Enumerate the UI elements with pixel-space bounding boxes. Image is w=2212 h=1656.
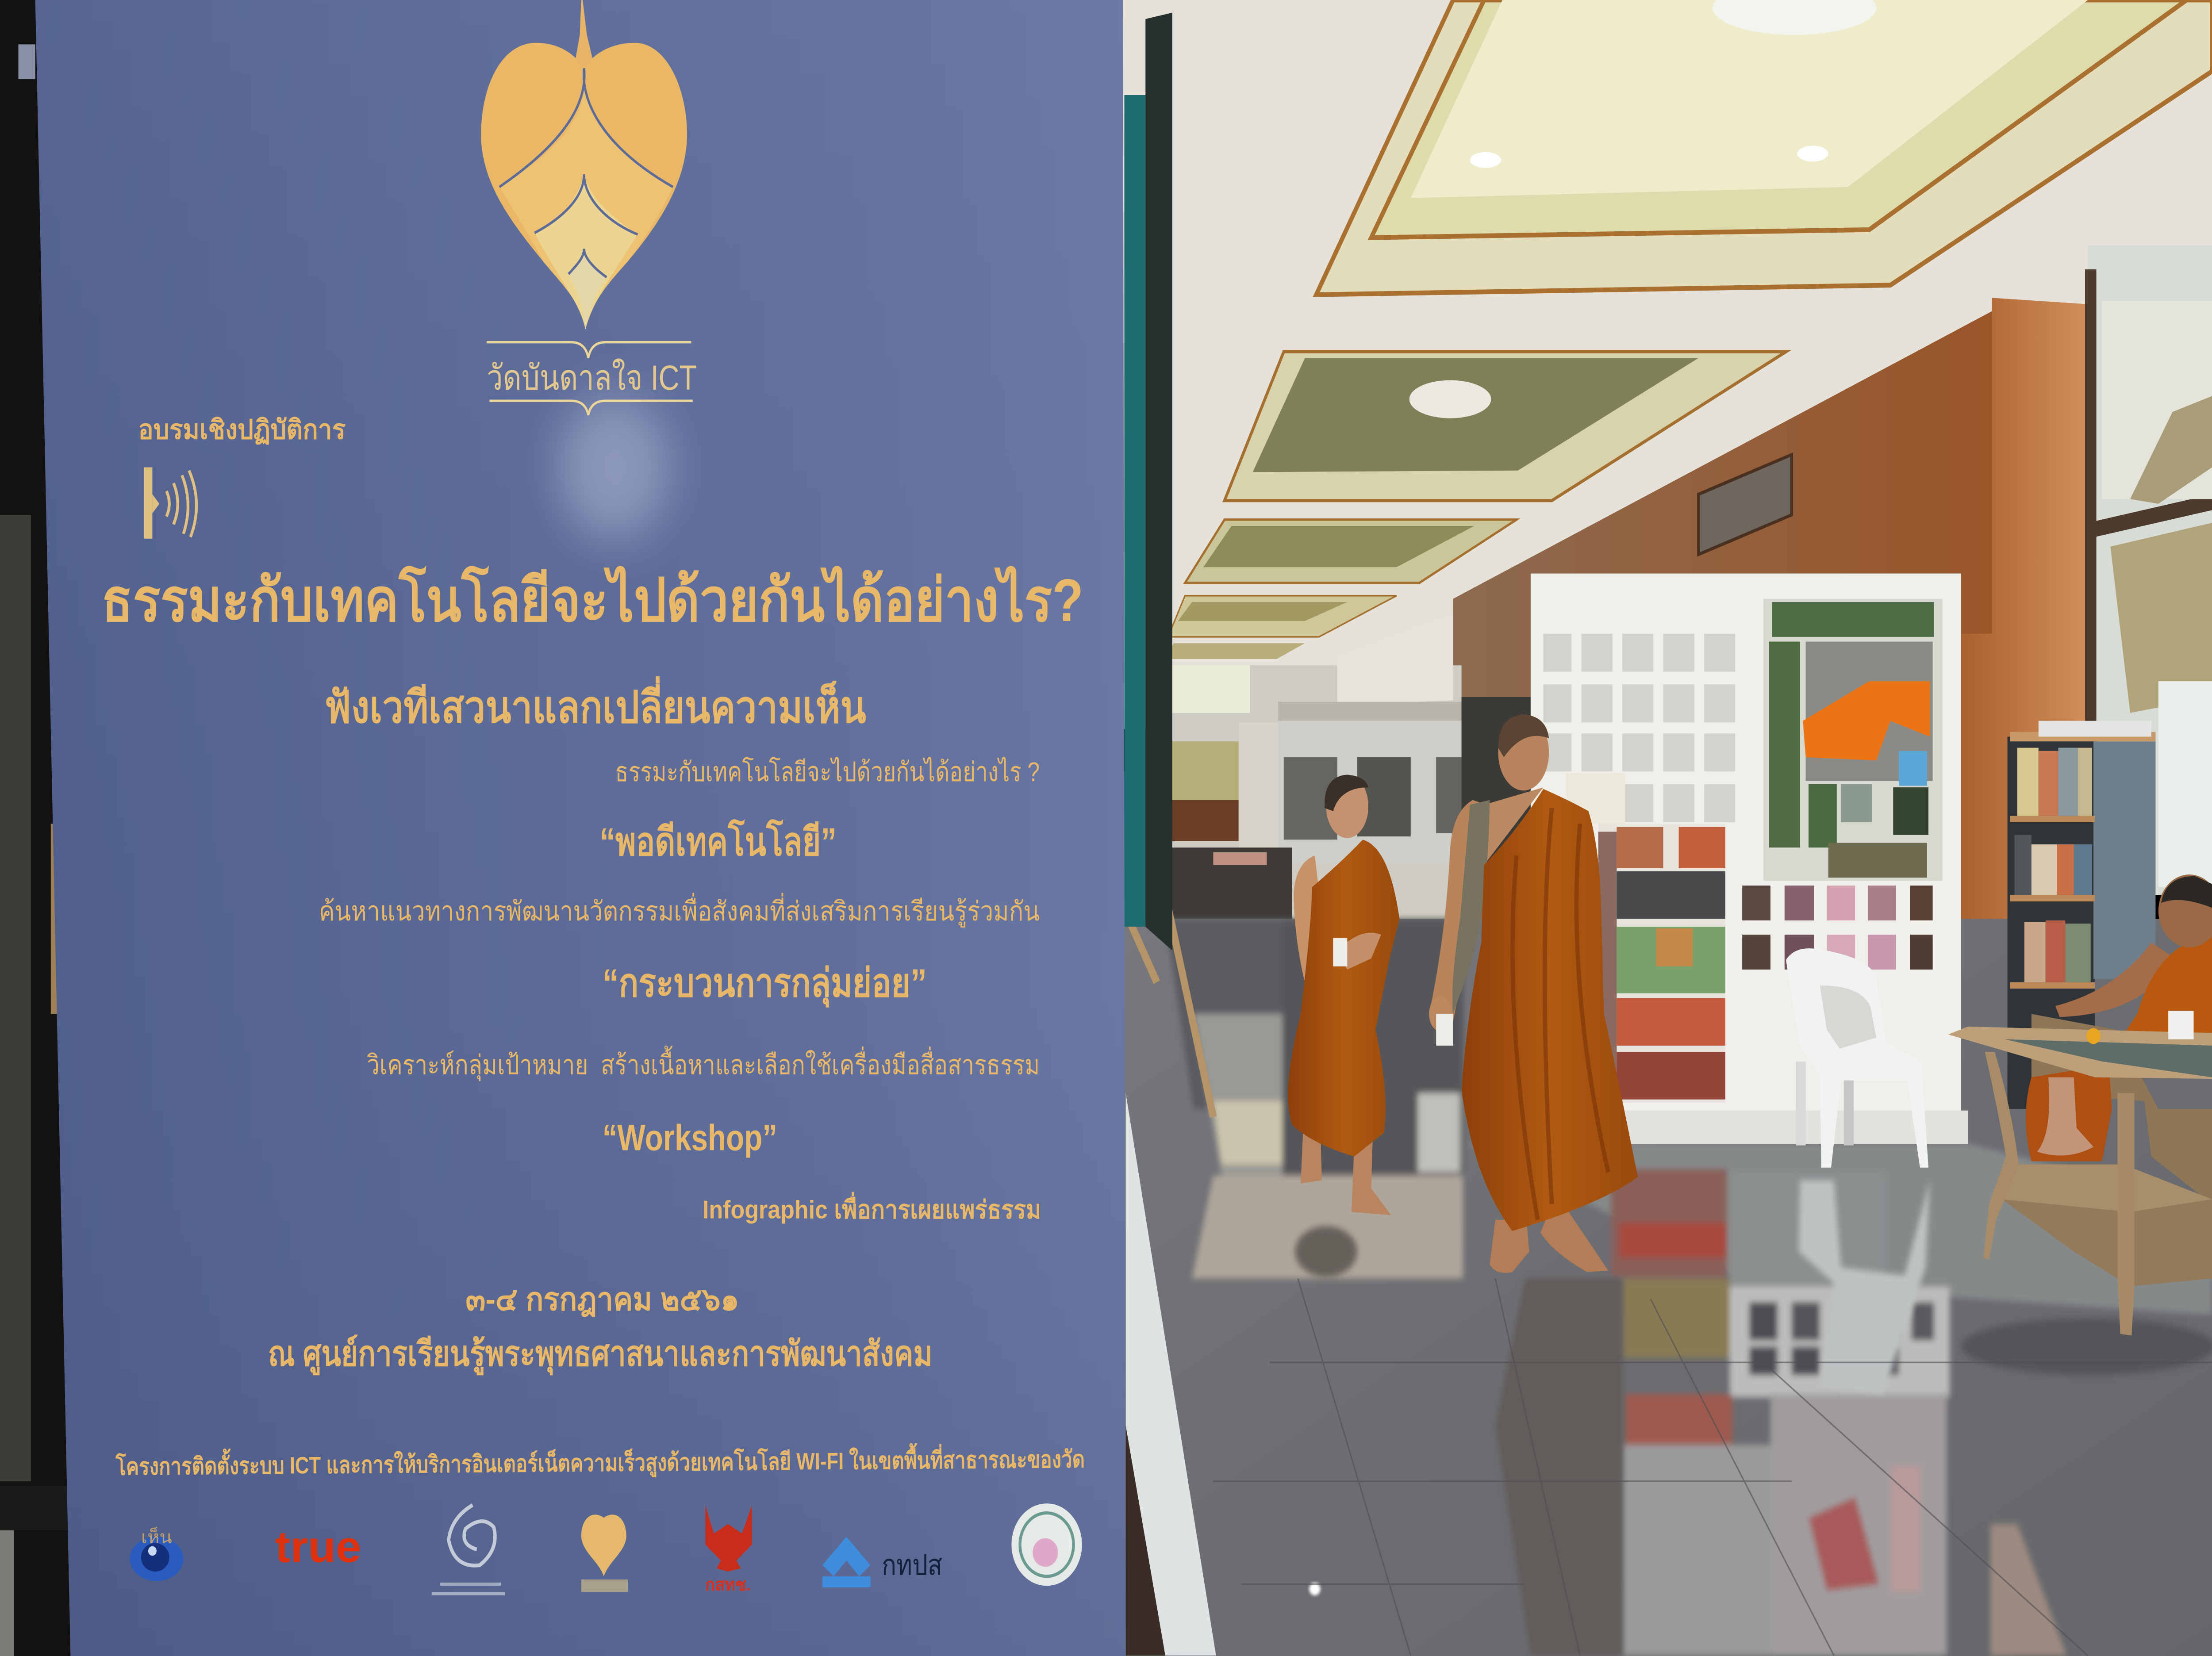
wooden wall (1453, 298, 2088, 1157)
bag strap (1452, 800, 1490, 1014)
legs (1301, 1122, 1391, 1215)
logo: blue eye: เห็น (141, 1526, 172, 1547)
seated monk and rattan table (1948, 874, 2212, 1335)
logo: small leaf (581, 1514, 628, 1592)
ceiling coffer 4 (1165, 596, 1397, 659)
logo: true: true (275, 1522, 361, 1572)
logo: blue chevron: กทปส (882, 1549, 942, 1581)
workshop description: Infographic เพื่อการเผยแพร่ธรรม (703, 1192, 1041, 1224)
appropriate technology description: ค้นหาแนวทางการพัฒนานวัตกรรมเพื่อสังคมที่ส่งเสริมการเรียนรู้ร่วมกัน (319, 893, 1040, 928)
logo: swirl (432, 1505, 505, 1594)
main monk (1429, 714, 1638, 1273)
ceiling coffer 2 (1225, 352, 1786, 501)
logo: garuda: กสทช. (705, 1575, 750, 1595)
table top (1948, 1027, 2212, 1079)
far corridor background (1165, 615, 1532, 939)
hand (1310, 968, 1330, 1003)
seated monk robe (2116, 935, 2212, 1046)
arm (1294, 855, 1329, 1001)
rattan armchair (2032, 1014, 2212, 1204)
ceiling coffer 3 (1185, 520, 1517, 583)
sponsor logos (130, 1503, 1082, 1595)
arm (1429, 800, 1495, 1022)
white lattice partition (1531, 574, 1968, 1144)
forum description: ธรรมะกับเทคโนโลยีจะไปด้วยกันได้อย่างไร ? (615, 756, 1040, 787)
seated monk foot (2037, 1077, 2093, 1156)
robe (1288, 840, 1399, 1157)
table legs (1983, 1052, 2019, 1259)
icon: speaker sound waves (144, 468, 196, 539)
event date: ๓-๔ กรกฎาคม ๒๕๖๑ (465, 1282, 739, 1317)
section heading: small group process: “กระบวนการกลุ่มย่อย” (603, 961, 927, 1008)
logo: blue eye (130, 1526, 184, 1581)
left monk (1288, 774, 1399, 1215)
plastic chair (1786, 948, 1928, 1168)
small notice (1566, 773, 1625, 824)
foot shadow (1295, 1226, 1357, 1277)
room background: ceiling (1114, 0, 2212, 729)
chair rear legs (1796, 1062, 1806, 1146)
main headline: ธรรมะกับเทคโนโลยีจะไปด้วยกันได้อย่างไร? (102, 565, 1083, 634)
floor (1123, 919, 2212, 1656)
hand with cup (1429, 997, 1452, 1031)
small group description: วิเคราะห์กลุ่มเป้าหมาย สร้างเนื้อหาและเลือกใช้เครื่องมือสื่อสารธรรม (367, 1046, 1040, 1081)
books (2015, 748, 2092, 982)
monk reflection on floor (1495, 1278, 1622, 1656)
chair reflection (1799, 1180, 1930, 1394)
seated monk arm (2055, 943, 2175, 1017)
support poles beside board (1124, 13, 1172, 951)
logo: garuda (705, 1505, 752, 1595)
table lower shelf and apron (2002, 1165, 2212, 1286)
bookcase (2008, 721, 2155, 1109)
poster: orange ribbon collage (1763, 599, 1943, 881)
project line: โครงการติดตั้งระบบ ICT และการให้บริการอินเตอร์เน็ตความเร็วสูงด้วยเทคโนโลยี WI-FI ในเขตพื้นที่สาธารณะของวัด (115, 1441, 1085, 1482)
white display boards on floor edge (1126, 887, 1216, 1656)
section heading: workshop: “Workshop” (603, 1117, 777, 1158)
workshop label: อบรมเชิงปฏิบัติการ (138, 415, 346, 445)
easel (1129, 887, 1213, 1117)
table shadow (1961, 1318, 2212, 1375)
lattice holes lower (1742, 886, 1933, 970)
lattice holes upper (1544, 634, 1735, 822)
logo: blue chevron (822, 1537, 942, 1587)
left dark frame (0, 0, 73, 1656)
head (1326, 774, 1368, 838)
floor partition reflection (1611, 1169, 2067, 1656)
logo: round seal (1011, 1503, 1082, 1586)
bodhi leaf logo (481, 0, 687, 330)
robe (1462, 789, 1638, 1231)
floor light reflections near monks (1165, 919, 2212, 1315)
seated monk head (2158, 874, 2212, 947)
window and golden naga (2085, 245, 2212, 895)
banner panel (35, 0, 1126, 1656)
poster: monks photo collage (1598, 824, 1725, 1103)
head (1498, 714, 1549, 790)
event venue: ณ ศูนย์การเรียนรู้พระพุทธศาสนาและการพัฒนาสังคม (268, 1334, 933, 1376)
logo open book lines and name: วัดบันดาลใจ ICT (487, 358, 697, 397)
chest (1484, 787, 1544, 865)
logo open book lines and name (487, 342, 697, 415)
section heading: appropriate technology: “พอดีเทคโนโลยี” (599, 819, 837, 864)
section heading: forum: ฟังเวทีเสวนาแลกเปลี่ยนความเห็น (324, 676, 866, 732)
floor tile joints (1213, 1278, 2212, 1656)
forearm and cup (1337, 933, 1381, 970)
ceiling coffer 1 (1316, 0, 2212, 295)
legs (1490, 1212, 1608, 1273)
